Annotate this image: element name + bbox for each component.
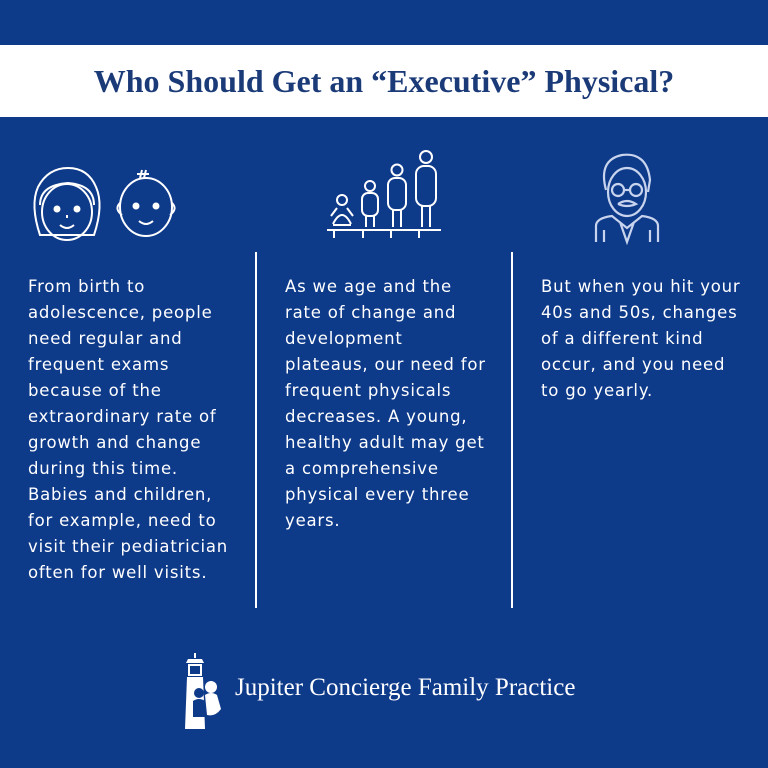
logo: [185, 653, 575, 729]
column 1 text: From birth to: [28, 277, 145, 296]
column 2 text: a comprehensive: [285, 459, 439, 478]
column 3 text: of a different kind: [541, 329, 703, 348]
icon: mother and baby faces: [34, 167, 176, 241]
column 2 text: rate of change and: [285, 303, 456, 322]
icon: growth stages: [327, 150, 441, 238]
column 2 text: As we age and the: [285, 277, 452, 296]
column 2 text: years.: [285, 511, 340, 530]
column 2 text: frequent physicals: [285, 381, 451, 400]
column 2 text: [285, 277, 486, 530]
column 1 text: visit their pediatrician: [28, 537, 228, 556]
column 1 text: adolescence, people: [28, 303, 213, 322]
icon: lighthouse family: [185, 653, 221, 729]
column 1 text: growth and change: [28, 433, 201, 452]
column 2 text: physical every three: [285, 485, 469, 504]
column 2 text: healthy adult may get: [285, 433, 485, 452]
column 2 text: development: [285, 329, 403, 348]
column 1 text: for example, need to: [28, 511, 216, 530]
column 1 text: because of the: [28, 381, 162, 400]
column 2 text: plateaus, our need for: [285, 355, 486, 374]
logo text: Jupiter Concierge Family Practice: [235, 674, 575, 701]
column 3 text: [541, 277, 741, 400]
column 3 text: to go yearly.: [541, 381, 653, 400]
icon: older man: [594, 154, 660, 245]
dividers: [255, 252, 257, 608]
column 1 text: Babies and children,: [28, 485, 212, 504]
column 1 text: [28, 277, 228, 582]
column 1 text: during this time.: [28, 459, 178, 478]
column 2 text: decreases. A young,: [285, 407, 467, 426]
header band: [0, 45, 768, 117]
title: Who Should Get an “Executive” Physical?: [94, 63, 674, 99]
column 1 text: frequent exams: [28, 355, 169, 374]
column 3 text: But when you hit your: [541, 277, 741, 296]
column 3 text: 40s and 50s, changes: [541, 303, 738, 322]
column 1 text: need regular and: [28, 329, 183, 348]
column 1 text: extraordinary rate of: [28, 407, 216, 426]
column 3 text: occur, and you need: [541, 355, 725, 374]
column 1 text: often for well visits.: [28, 563, 207, 582]
